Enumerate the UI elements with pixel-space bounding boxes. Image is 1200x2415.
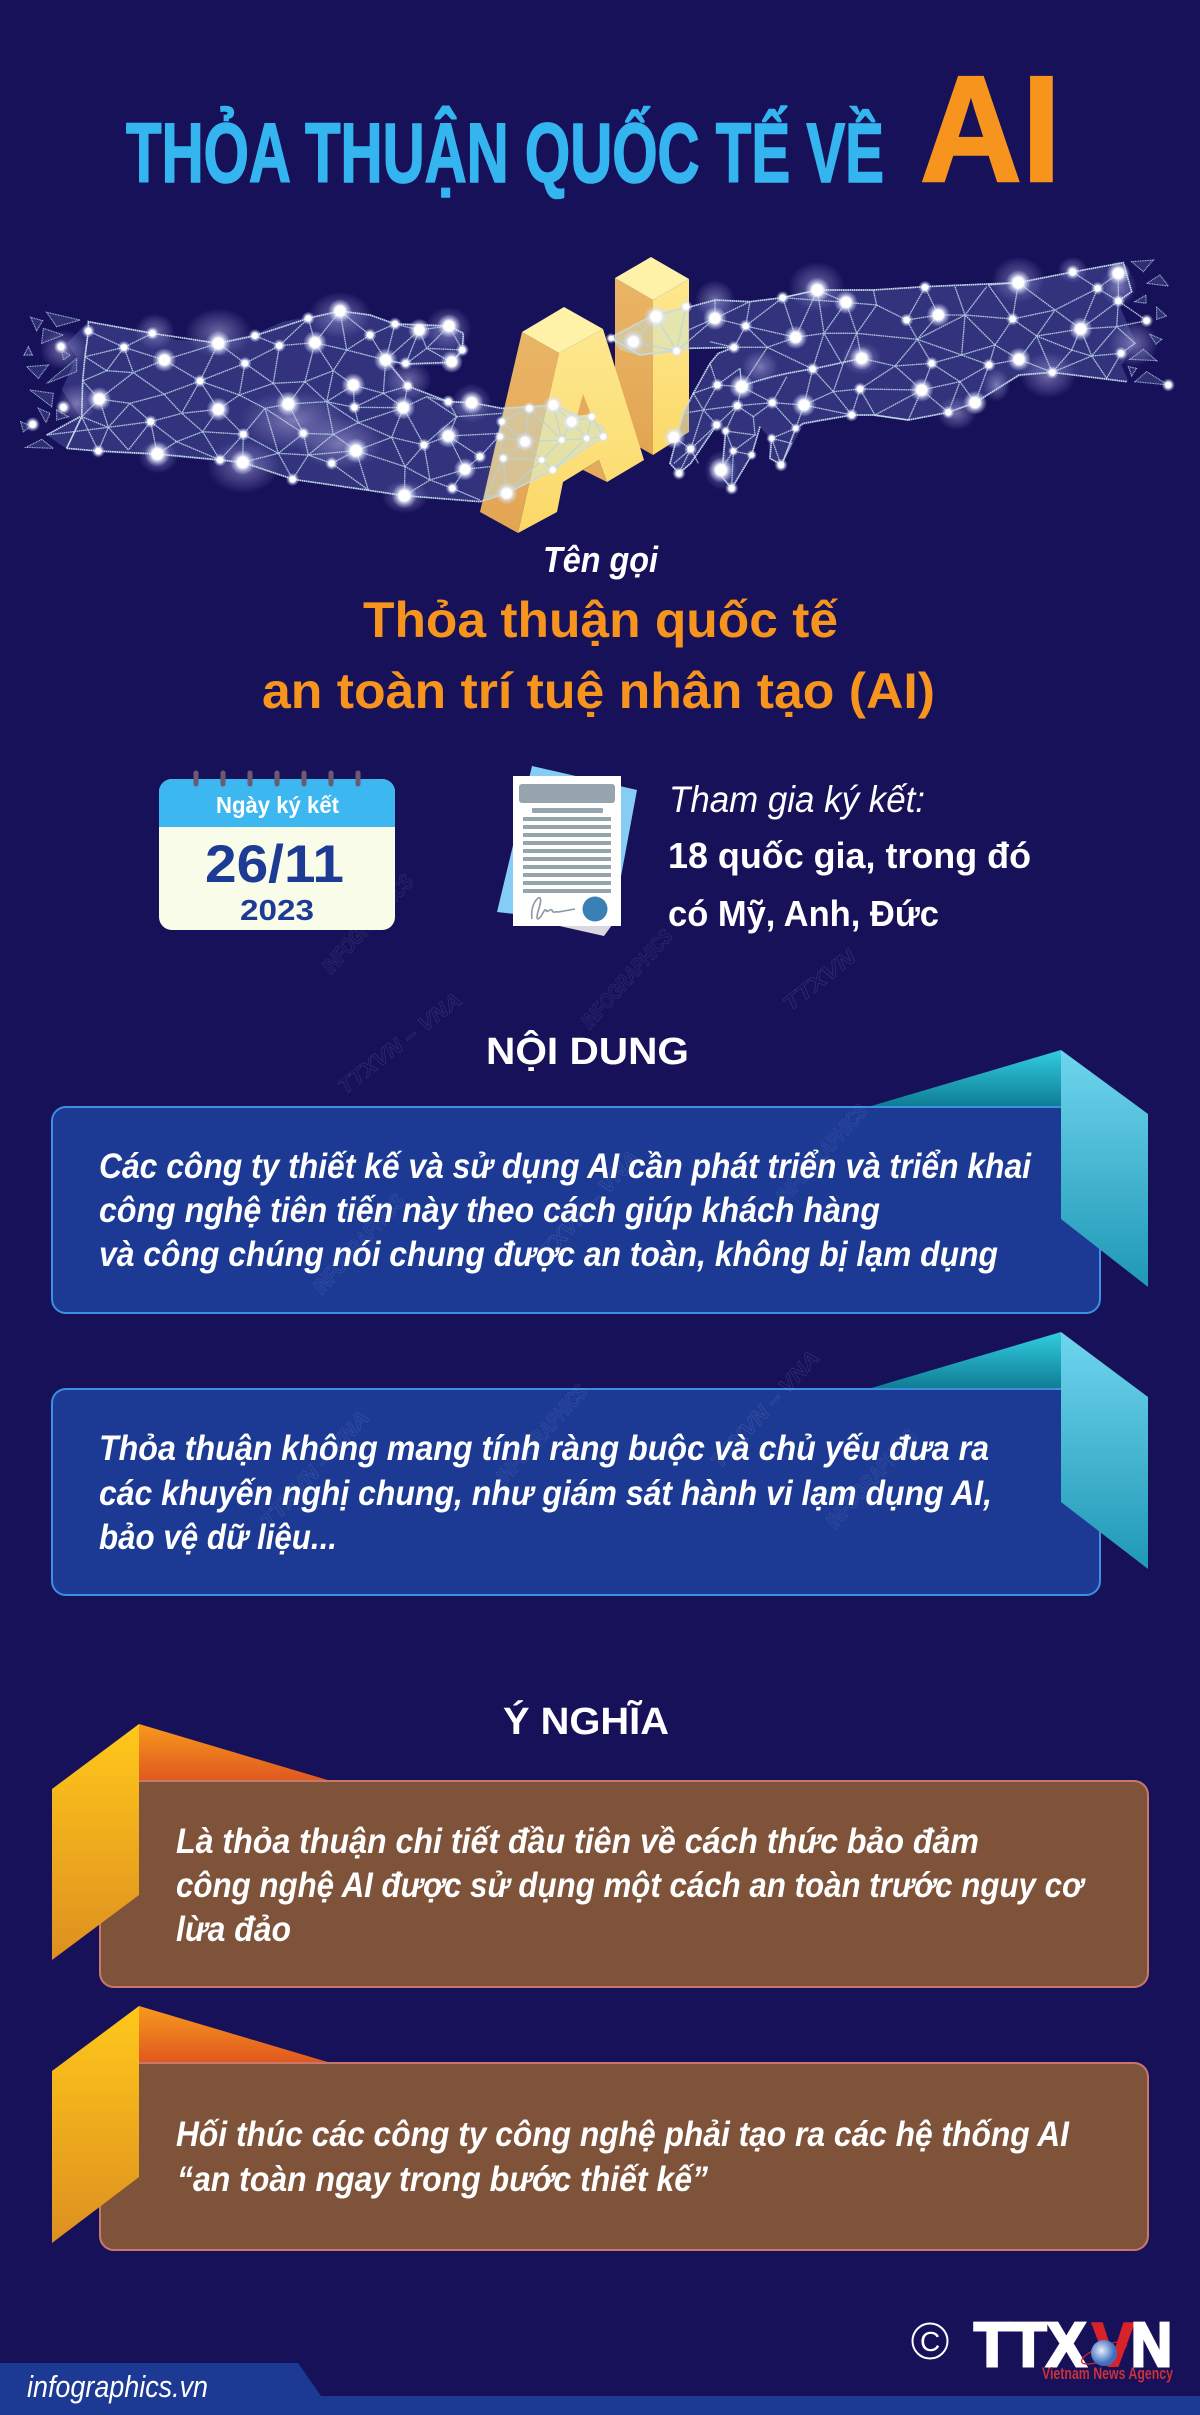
panel: meaning 2: [52, 2006, 1148, 2250]
participants text: [668, 779, 1031, 934]
shards: [21, 312, 80, 448]
panel text: [99, 1429, 992, 1557]
panel text: [176, 1822, 1086, 1949]
shards: [1128, 260, 1168, 385]
watermarks: TTXVN – VNA: [257, 1406, 374, 1533]
panel text: “an toàn ngay trong bước thiết kế”: [177, 2160, 708, 2199]
panel text: [99, 1147, 1032, 1274]
date: 26/11: [205, 835, 344, 894]
watermarks: INFOGRAPHICS: [822, 1425, 922, 1533]
title: THỎA THUẬN QUỐC TẾ VỀ: [126, 106, 884, 200]
footer band: [0, 2363, 1200, 2415]
watermarks: INFOGRAPHICS: [492, 1380, 592, 1488]
calendar rings: [196, 773, 358, 784]
logo: TTXVN: [912, 2311, 1173, 2383]
logo: TTXVN: N: [1131, 2311, 1172, 2380]
watermarks: TTXVN: [779, 945, 861, 1016]
panel text: Hối thúc các công ty công nghệ phải tạo ra các hệ thống AI: [176, 2115, 1070, 2154]
panel text: Các công ty thiết kế và sử dụng AI cần phát triển và triển khai: [99, 1147, 1032, 1186]
participants text: Tham gia ký kết:: [669, 779, 925, 820]
title: AI: [920, 44, 1061, 213]
title: [126, 44, 1061, 213]
panel text: và công chúng nói chung được an toàn, không bị lạm dụng: [99, 1235, 998, 1274]
logo: TTXVN: TTX: [974, 2311, 1086, 2380]
network nodes: [606, 261, 1175, 495]
watermarks: TTXVN – VNA: [707, 1346, 824, 1473]
mesh over letter: [485, 405, 603, 497]
panel: content 2: [52, 1332, 1148, 1595]
mesh lines: [47, 311, 502, 500]
participants text: 18 quốc gia, trong đó: [668, 835, 1031, 876]
panel text: lừa đảo: [176, 1910, 291, 1949]
agreement name: an toàn trí tuệ nhân tạo (AI): [262, 663, 935, 719]
heading: ý nghĩa: Ý NGHĨA: [503, 1699, 669, 1743]
icon: signed document: [497, 766, 637, 936]
watermarks: INFOGRAPHICS: [772, 1100, 872, 1208]
mesh lines: [611, 272, 1147, 488]
illustration: left mesh hand: [21, 292, 609, 513]
panel text: các khuyến nghị chung, như giám sát hành vi lạm dụng AI,: [99, 1474, 992, 1513]
panel: content 1: [52, 1050, 1148, 1313]
name label: Tên gọi: [543, 539, 659, 580]
illustration: golden 3D AI letters: [480, 257, 689, 533]
watermarks: INFOGRAPHICS: [318, 870, 418, 978]
watermarks: INFOGRAPHICS: [577, 925, 677, 1033]
network nodes: [25, 299, 609, 508]
watermarks: TTXVN – VNA: [334, 988, 466, 1099]
panel text: Là thỏa thuận chi tiết đầu tiên về cách thức bảo đảm: [176, 1822, 979, 1861]
arm outline: [611, 263, 1132, 488]
heading: nội dung: NỘI DUNG: [486, 1028, 689, 1073]
footer website: infographics.vn: [27, 2369, 208, 2404]
year: 2023: [240, 895, 314, 927]
panel text: bảo vệ dữ liệu...: [99, 1518, 337, 1557]
arm outline: [47, 311, 603, 502]
participants text: có Mỹ, Anh, Đức: [668, 893, 939, 934]
panel text: công nghệ AI được sử dụng một cách an toàn trước nguy cơ: [176, 1866, 1086, 1905]
watermarks: TTXVN – VNA: [527, 1146, 644, 1273]
watermarks: [257, 870, 922, 1533]
logo: TTXVN: V: [1092, 2311, 1134, 2380]
illustration: right mesh hand: [606, 257, 1175, 495]
calendar: signing date: [159, 773, 395, 930]
logo: TTXVN: C: [920, 2326, 940, 2357]
panel text: Thỏa thuận không mang tính ràng buộc và chủ yếu đưa ra: [99, 1429, 989, 1468]
panel text: công nghệ tiên tiến này theo cách giúp khách hàng: [99, 1191, 880, 1230]
agreement name: [262, 592, 935, 719]
panel text: [176, 2115, 1070, 2199]
watermarks: INFOGRAPHICS: [309, 1190, 409, 1298]
panel: meaning 1: [52, 1724, 1148, 1987]
agreement name: Thỏa thuận quốc tế: [363, 592, 838, 648]
calendar label: Ngày ký kết: [216, 792, 339, 818]
